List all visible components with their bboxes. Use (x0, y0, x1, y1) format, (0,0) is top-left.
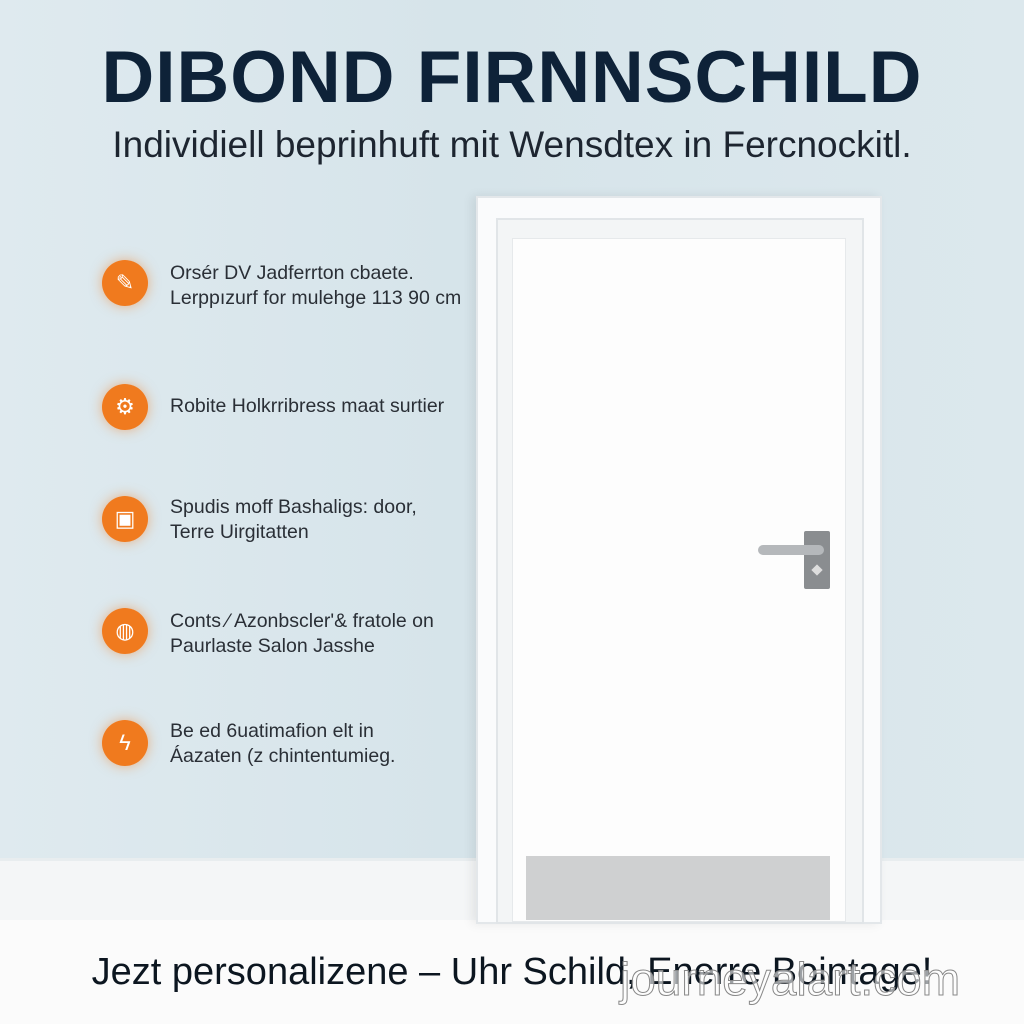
feature 3: Terre Uirgitatten (170, 521, 309, 543)
icon: box: ▣ (115, 506, 135, 531)
icon: brush (102, 260, 148, 306)
feature 4: Paurlaste Salon Jasshe (170, 635, 375, 657)
icon: gear (102, 384, 148, 430)
floor (0, 920, 1024, 1024)
feature 5: Be ed 6uatimafion elt in (170, 720, 374, 742)
feature 5: Áazaten (z chintentumieg. (170, 745, 395, 767)
call to action: Jezt personalizene – Uhr Schild, Enerre Bointage! (92, 951, 932, 993)
feature 2 (94, 376, 444, 438)
feature 1: Orsér DV Jadferrton cbaete. (170, 262, 414, 284)
kick plate (526, 856, 830, 920)
icon: lightning: ϟ (119, 730, 131, 755)
icon: box (102, 496, 148, 542)
icon: globe (102, 608, 148, 654)
door frame (476, 196, 882, 924)
title: DIBOND FIRNNSCHILD (102, 37, 922, 118)
watermark: journeyalart.com (620, 953, 960, 1005)
feature 2: Robite Holkrribress maat surtier (170, 395, 444, 417)
feature 3: Spudis moff Bashaligs: door, (170, 496, 417, 518)
icon: gear: ⚙ (115, 394, 135, 419)
feature 1 (94, 252, 461, 314)
feature 5 (94, 712, 395, 774)
feature 4 (94, 600, 434, 662)
feature 3 (94, 488, 417, 550)
feature 1: Lerppızurf for mulehge 113 90 cm (170, 287, 461, 309)
icon: globe: ◍ (115, 618, 135, 643)
icon: lightning (102, 720, 148, 766)
icon: brush: ✎ (116, 270, 134, 295)
subtitle: Individiell beprinhuft mit Wensdtex in Fercnockitl. (112, 124, 912, 165)
door panel (512, 238, 846, 922)
feature 4: Conts ⁄ Azonbscler'& fratole on (170, 610, 434, 632)
door (472, 196, 882, 924)
baseboard (0, 858, 1024, 923)
handle (758, 531, 830, 589)
